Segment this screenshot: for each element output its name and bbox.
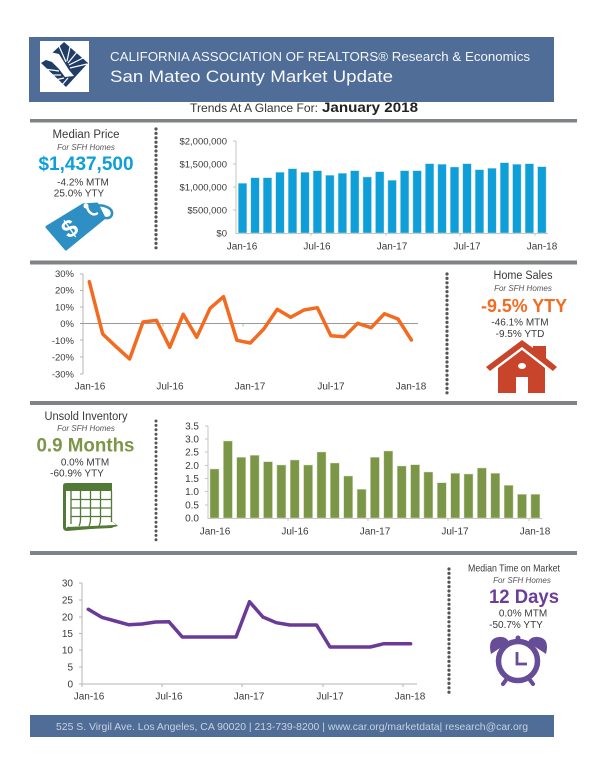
footer bar: [30, 715, 554, 737]
bar chart: median price: Jul-17: [453, 242, 481, 252]
panel: median time on market: [468, 562, 560, 684]
line chart: median time on market: Jan-16: [74, 692, 105, 702]
subtitle: [190, 99, 418, 115]
line chart: home sales: -10%: [52, 336, 75, 347]
bar chart: median price: $1,500,000: [179, 160, 227, 170]
bar chart: median price: $2,000,000: [179, 136, 227, 148]
line chart: median time on market: 30: [62, 578, 73, 590]
line chart: home sales: 0%: [60, 319, 75, 330]
bar chart: unsold inventory: 0.0: [185, 514, 199, 524]
time on market changes: -50.7% YTY: [489, 620, 543, 631]
line chart: home sales: [52, 269, 427, 392]
divider: unsold inventory: [154, 421, 158, 540]
line chart: median time on market: [62, 578, 426, 702]
line chart: home sales: 30%: [55, 269, 75, 280]
bar chart: unsold inventory: [185, 422, 551, 538]
bar chart: median price: $1,000,000: [179, 182, 227, 194]
median price changes: -4.2% MTM: [57, 178, 109, 188]
divider: median price: [154, 129, 158, 252]
line chart: median time on market: 5: [67, 662, 73, 674]
bar chart: unsold inventory: Jul-17: [441, 526, 469, 538]
bar chart: unsold inventory: Jul-16: [281, 526, 309, 538]
line chart: median time on market: Jan-17: [234, 692, 265, 702]
median price subtitle: For SFH Homes: [57, 143, 115, 152]
bar chart: unsold inventory: Jan-18: [520, 526, 551, 538]
bar chart: unsold inventory: 1.0: [185, 487, 199, 498]
divider: home sales: [445, 274, 449, 394]
line chart: home sales: Jul-16: [156, 382, 184, 392]
median price value: $1,437,500: [38, 154, 134, 175]
home sales changes: [491, 318, 549, 340]
line chart: median time on market: 20: [62, 612, 73, 624]
bar chart: unsold inventory: 3.5: [185, 422, 199, 432]
line chart: median time on market: Jan-18: [395, 692, 426, 702]
icon: house: [486, 340, 557, 393]
bar chart: median price: Jan-17: [377, 242, 408, 252]
bar chart: unsold inventory: Jan-17: [360, 526, 391, 538]
logo: [40, 41, 89, 92]
divider: median time on market: [447, 569, 451, 695]
icon: alarm clock: [490, 636, 547, 684]
panel: median price: [38, 129, 134, 249]
bar chart: unsold inventory: 2.5: [185, 448, 199, 458]
panel: home sales: [481, 270, 568, 393]
time on market value: 12 Days: [489, 587, 559, 608]
bar chart: median price: [179, 136, 558, 252]
line chart: home sales: 10%: [55, 302, 75, 314]
time on market changes: [489, 608, 547, 631]
footer contact text: 525 S. Virgil Ave. Los Angeles, CA 90020 | 213-739-8200 | www.car.org/marketdata| research@car.org: [56, 721, 528, 733]
time on market subtitle: For SFH Homes: [493, 576, 551, 585]
bar chart: median price: Jul-16: [303, 242, 331, 252]
line chart: median time on market: 0: [67, 680, 73, 690]
line chart: home sales: 20%: [55, 286, 75, 296]
bar chart: unsold inventory: 1.5: [185, 474, 199, 485]
unsold inventory value: 0.9 Months: [36, 436, 134, 456]
bar chart: unsold inventory: 2.0: [185, 461, 199, 472]
line chart: home sales: Jan-16: [75, 382, 106, 392]
line chart: median time on market: Jul-17: [316, 692, 344, 702]
line chart: home sales: -30%: [52, 370, 75, 380]
median price changes: 25.0% YTY: [54, 188, 105, 200]
subtitle: Trends At A Glance For:: [190, 101, 318, 115]
time on market changes: 0.0% MTM: [499, 608, 547, 620]
home sales subtitle: For SFH Homes: [494, 284, 552, 293]
unsold inventory title: Unsold Inventory: [44, 411, 128, 423]
line chart: median time on market: Jul-16: [155, 692, 183, 702]
median price changes: [54, 178, 109, 200]
unsold inventory changes: [50, 458, 109, 480]
bar chart: median price: $500,000: [187, 206, 227, 216]
panel: unsold inventory: [36, 411, 134, 531]
home sales value: -9.5% YTY: [481, 295, 568, 316]
time on market title: Median Time on Market: [468, 562, 560, 574]
bar chart: unsold inventory: Jan-16: [200, 526, 231, 538]
unsold inventory changes: -60.9% YTY: [50, 468, 104, 480]
line chart: home sales: Jul-17: [317, 382, 345, 392]
home sales changes: -9.5% YTD: [496, 329, 544, 340]
line chart: median time on market: 15: [62, 629, 73, 640]
bar chart: unsold inventory: 3.0: [185, 434, 199, 446]
subtitle: January 2018: [322, 99, 418, 115]
bar chart: median price: Jan-18: [527, 242, 558, 252]
header title line 2: San Mateo County Market Update: [110, 67, 393, 86]
unsold inventory subtitle: For SFH Homes: [57, 424, 115, 433]
bar chart: median price: $0: [216, 228, 227, 240]
median price title: Median Price: [52, 129, 120, 141]
line chart: median time on market: 25: [62, 596, 73, 606]
icon: price tag: $: [56, 213, 84, 244]
home sales changes: -46.1% MTM: [491, 318, 549, 328]
bar chart: median price: Jan-16: [227, 242, 258, 252]
icon: calendar: [63, 483, 118, 531]
unsold inventory changes: 0.0% MTM: [61, 458, 109, 468]
header title line 1: CALIFORNIA ASSOCIATION OF REALTORS® Research & Economics: [110, 49, 531, 64]
line chart: home sales: Jan-17: [235, 382, 266, 392]
line chart: home sales: Jan-18: [396, 382, 427, 392]
header banner: [29, 37, 554, 102]
bar chart: unsold inventory: 0.5: [185, 500, 199, 512]
line chart: median time on market: 10: [62, 646, 73, 656]
home sales title: Home Sales: [494, 270, 553, 282]
line chart: home sales: -20%: [52, 352, 75, 364]
